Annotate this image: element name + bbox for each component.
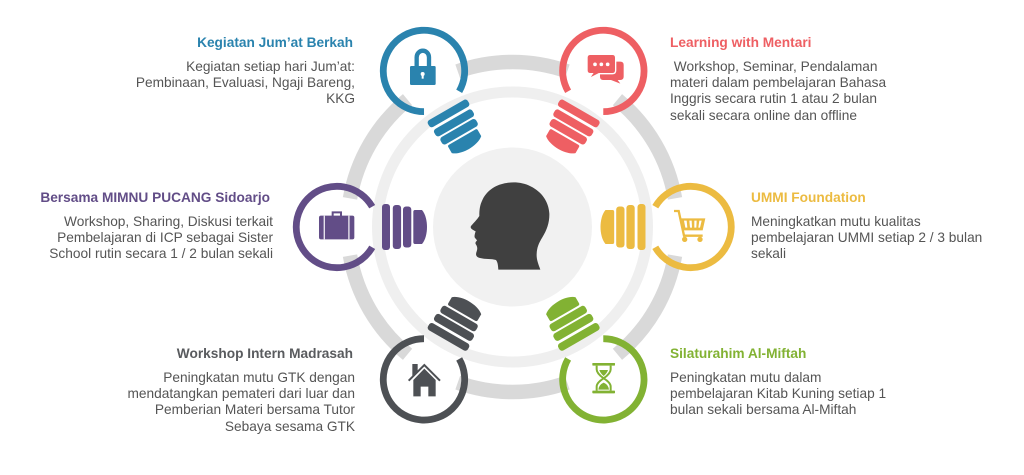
bulb: red xyxy=(523,15,659,169)
body text: Pembelajaran di ICP sebagai Sister xyxy=(57,230,273,245)
body text: Sebaya sesama GTK xyxy=(225,419,355,434)
heading: Workshop Intern Madrasah xyxy=(177,346,353,360)
bulb: green xyxy=(523,281,659,435)
body text: bulan sekali bersama Al-Miftah xyxy=(670,402,856,417)
bulb: dark gray xyxy=(368,281,504,435)
heading: Silaturahim Al-Miftah xyxy=(670,346,806,360)
body text: Inggris secara rutin 1 atau 2 bulan xyxy=(670,91,877,106)
icon: shopping cart xyxy=(674,211,705,242)
body text: Workshop, Sharing, Diskusi terkait xyxy=(64,214,273,229)
outer ring xyxy=(348,62,678,392)
body text: Workshop, Seminar, Pendalaman xyxy=(674,59,877,74)
body text: materi dalam pembelajaran Bahasa xyxy=(670,75,886,90)
inner ring xyxy=(378,92,648,362)
text: UMMI Foundation xyxy=(751,190,982,261)
body text: School rutin secara 1 / 2 bulan sekali xyxy=(49,246,273,261)
heading: Bersama MIMNU PUCANG Sidoarjo xyxy=(40,190,270,204)
body text: Peningkatan mutu GTK dengan xyxy=(163,370,355,385)
body text: KKG xyxy=(326,91,355,106)
body text: Pemberian Materi bersama Tutor xyxy=(155,402,355,417)
heading: Learning with Mentari xyxy=(670,34,811,50)
body text: Kegiatan setiap hari Jum’at: xyxy=(186,59,355,74)
body text xyxy=(136,59,355,106)
body text: pembelajaran UMMI setiap 2 / 3 bulan xyxy=(751,230,982,245)
body text: Pembinaan, Evaluasi, Ngaji Bareng, xyxy=(136,75,355,90)
body text: sekali secara online dan offline xyxy=(670,108,857,123)
text: Bersama MIMNU PUCANG Sidoarjo xyxy=(40,190,273,261)
text: Learning with Mentari xyxy=(670,34,886,123)
body text xyxy=(49,214,273,261)
central circle xyxy=(433,148,592,306)
bulb: blue xyxy=(368,15,504,169)
text: Silaturahim Al-Miftah xyxy=(670,346,886,417)
icon: head silhouette xyxy=(471,182,549,270)
body text: Peningkatan mutu dalam xyxy=(670,370,821,385)
icon: suitcase xyxy=(319,212,354,239)
bulb: purple xyxy=(296,186,427,268)
body text: Meningkatkan mutu kualitas xyxy=(751,214,921,229)
body text: pembelajaran Kitab Kuning setiap 1 xyxy=(670,386,886,401)
icon: hourglass xyxy=(592,363,615,393)
icon: padlock xyxy=(410,51,436,85)
body text xyxy=(670,370,886,417)
icon: chat bubbles xyxy=(587,54,624,84)
icon: house xyxy=(409,364,440,396)
heading: UMMI Foundation xyxy=(751,190,866,204)
bulb: yellow xyxy=(600,186,731,268)
body text: mendatangkan pemateri dari luar dan xyxy=(127,386,355,401)
text: Kegiatan Jum'at Berkah xyxy=(136,34,355,106)
body text xyxy=(751,214,982,261)
body text xyxy=(670,59,886,123)
heading: Kegiatan Jum’at Berkah xyxy=(197,34,353,50)
body text: sekali xyxy=(751,246,786,261)
text: Workshop Intern Madrasah xyxy=(127,346,355,434)
body text xyxy=(127,370,355,434)
